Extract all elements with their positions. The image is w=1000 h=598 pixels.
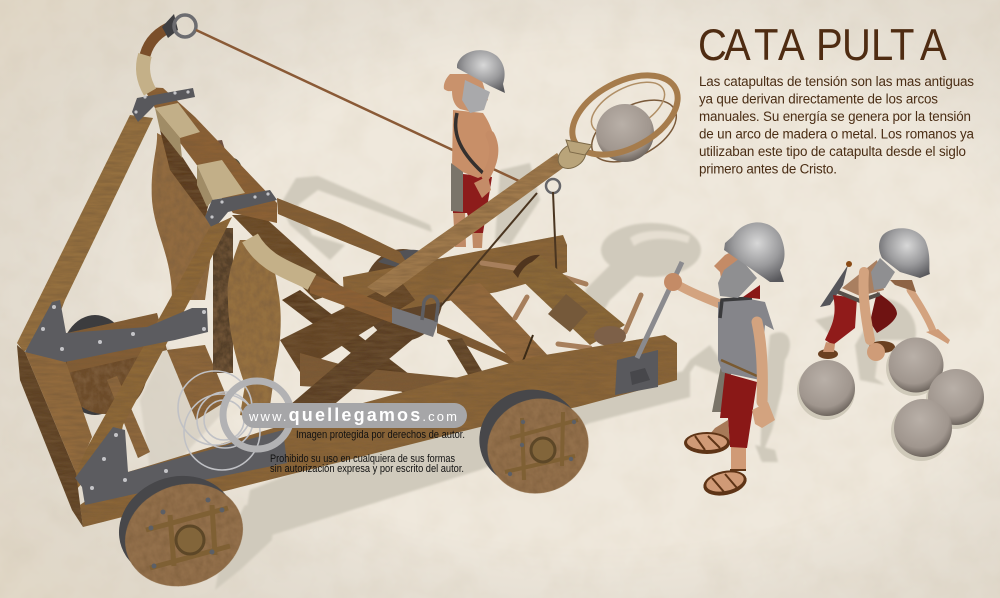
- belt: [721, 360, 757, 376]
- soldier with lever: [664, 222, 785, 499]
- chain skirt: [712, 360, 732, 412]
- lower iron plate: [75, 427, 287, 505]
- beam under lower bow: [232, 215, 345, 300]
- arm and hand: [486, 135, 494, 176]
- top beam: [143, 87, 277, 223]
- belt: [838, 292, 880, 301]
- hanging ropes: [440, 179, 560, 387]
- bowstring: [196, 30, 519, 181]
- watermark notices: [270, 429, 465, 475]
- hanging arm: [757, 322, 762, 402]
- left side beam: [17, 345, 92, 527]
- stone in basket: [596, 104, 654, 162]
- lower bow arm: [310, 273, 392, 323]
- watermark url: www.quellegamos.com: [248, 405, 457, 425]
- shoulder: [890, 280, 916, 292]
- description text: Las catapultas de tensión son las mas antiguas: [699, 74, 974, 89]
- description text: utilizaban este tipo de catapulta desde el siglo: [699, 144, 966, 159]
- left iron plate: [25, 300, 208, 362]
- rope bindings: [155, 103, 245, 207]
- description text: primero antes de Cristo.: [699, 162, 837, 176]
- arm to lever: [676, 284, 720, 304]
- helmet: [724, 222, 785, 282]
- stone balls: [797, 338, 984, 461]
- upper bow arm: [144, 28, 168, 60]
- back block with disc: [205, 140, 243, 194]
- red tunic and leg: [720, 373, 757, 448]
- near arm: [863, 272, 870, 340]
- bow tip and ring: [162, 14, 196, 38]
- near hand: [867, 343, 885, 361]
- crouching soldier: [818, 228, 950, 361]
- helmet: [457, 50, 505, 93]
- near leg and sandal: [701, 445, 749, 499]
- watermark notices: sin autorización expresa y por escrito del autor.: [270, 463, 464, 475]
- rear and inner frame beams: [67, 198, 567, 458]
- ring: [559, 59, 691, 171]
- net: [582, 72, 686, 175]
- watermark: [178, 371, 467, 475]
- near red leg: [825, 295, 857, 345]
- description text: ya que derivan directamente de los arcos: [699, 92, 938, 106]
- right iron plate: [615, 350, 658, 395]
- hand: [752, 402, 775, 428]
- head and nose: [444, 74, 488, 112]
- soldier on top: [444, 50, 505, 248]
- cheek guard: [462, 80, 490, 113]
- face: [714, 250, 745, 285]
- front upright: [73, 217, 232, 490]
- armour: [718, 298, 774, 380]
- bow metal tip: [392, 296, 438, 337]
- front wheel left: [104, 460, 257, 598]
- winch: [482, 255, 641, 348]
- rear right wheel: [363, 249, 443, 341]
- basket: [559, 59, 691, 175]
- helmet: [879, 228, 930, 278]
- watermark pill: [242, 403, 467, 428]
- cheek guard: [718, 258, 757, 298]
- far leg and sandal: [684, 420, 730, 454]
- front wheel right: [466, 375, 602, 508]
- catapult: [17, 14, 691, 598]
- sword: [820, 265, 848, 307]
- far hand: [926, 329, 950, 344]
- sandal: [818, 349, 838, 359]
- watermark big ring: [223, 381, 291, 449]
- hand on lever: [664, 273, 682, 291]
- description text: de un arco de madera o metal. Los romanos ya: [699, 126, 975, 142]
- lower bow rope wrap: [250, 238, 312, 282]
- upper bow rope wrap: [143, 55, 150, 92]
- sandal near balls: [869, 341, 895, 353]
- lever: [637, 262, 682, 358]
- rear left wheel: [59, 315, 147, 415]
- far arm: [910, 290, 933, 331]
- metal top brackets: [132, 88, 277, 230]
- watermark notices: Imagen protegida por derechos de autor.: [296, 429, 465, 441]
- chain skirt: [451, 163, 463, 212]
- watermark thin rings: [178, 371, 260, 470]
- ground shadows: [140, 163, 916, 590]
- arm rope knot: [553, 138, 592, 174]
- torso: [452, 110, 495, 178]
- red tunic: [453, 173, 492, 233]
- main side beam: [80, 335, 677, 527]
- dark strap: [720, 298, 752, 318]
- lower legs: [453, 210, 483, 248]
- red collar: [743, 285, 760, 299]
- strap: [456, 113, 483, 173]
- title: CATAPULTA: [698, 20, 947, 69]
- torso: [842, 260, 884, 296]
- spring posts of twisted fibre: [152, 133, 281, 420]
- cheek guard: [871, 258, 895, 290]
- description text: [699, 74, 975, 176]
- far red leg: [870, 292, 897, 333]
- description text: manuales. Su energía se genera por la tensión: [699, 109, 971, 124]
- throwing arm: [367, 153, 567, 297]
- watermark notices: Prohibido su uso en cualquiera de sus formas: [270, 453, 455, 465]
- rear upright: [17, 115, 153, 352]
